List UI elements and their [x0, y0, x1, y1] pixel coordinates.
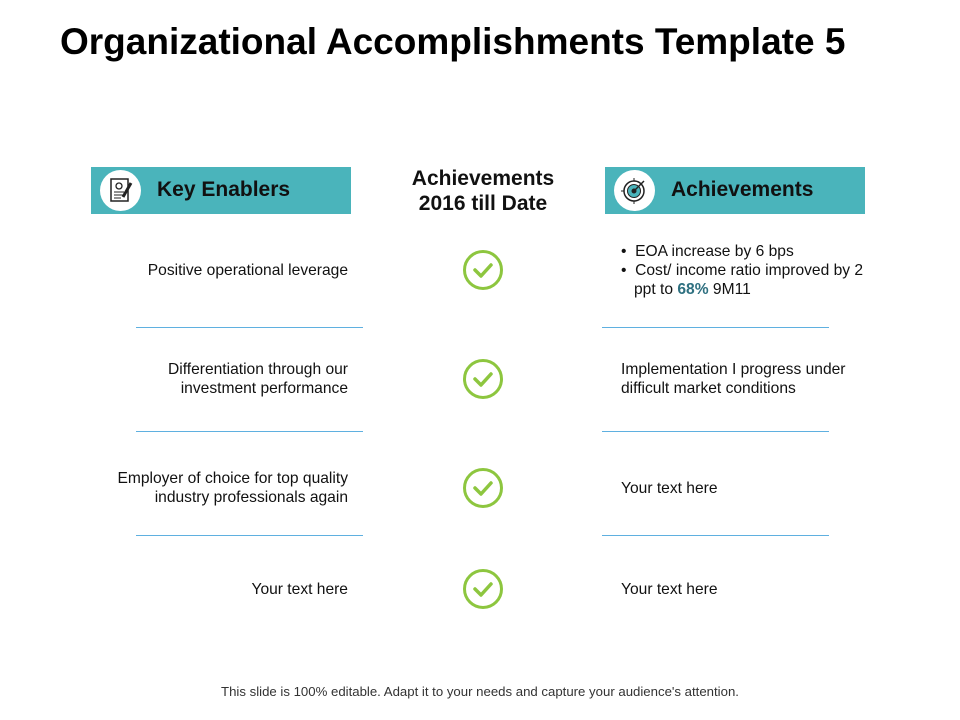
left texts: Positive operational leverage [148, 262, 348, 279]
header: achievements: Achievements [671, 178, 813, 201]
right texts: ppt to 68% 9M11 [634, 281, 751, 298]
text: investment performance [181, 380, 348, 397]
right texts: • EOA increase by 6 bps [621, 243, 794, 260]
footer: This slide is 100% editable. Adapt it to your needs and capture your audience's attention. [221, 684, 739, 699]
center heading: 2016 till Date [419, 192, 547, 215]
header: key enablers: Key Enablers [157, 178, 290, 201]
text: Your text here [621, 581, 718, 598]
text: difficult market conditions [621, 380, 796, 397]
text: Employer of choice for top quality [117, 470, 348, 487]
right texts: • Cost/ income ratio improved by 2 [621, 262, 863, 279]
text: industry professionals again [155, 489, 348, 506]
text: Implementation I progress under [621, 361, 846, 378]
right texts [621, 243, 863, 298]
header: achievements [605, 167, 865, 214]
text: Differentiation through our [168, 361, 348, 378]
text: Your text here [621, 480, 718, 497]
center heading [412, 167, 554, 215]
header: key enablers [91, 167, 351, 214]
icon: target [614, 170, 655, 211]
title: Organizational Accomplishments Template 5 [60, 21, 845, 62]
center heading: Achievements [412, 167, 554, 190]
icon: document [100, 170, 141, 211]
text: Your text here [251, 581, 348, 598]
dividers [136, 327, 363, 328]
